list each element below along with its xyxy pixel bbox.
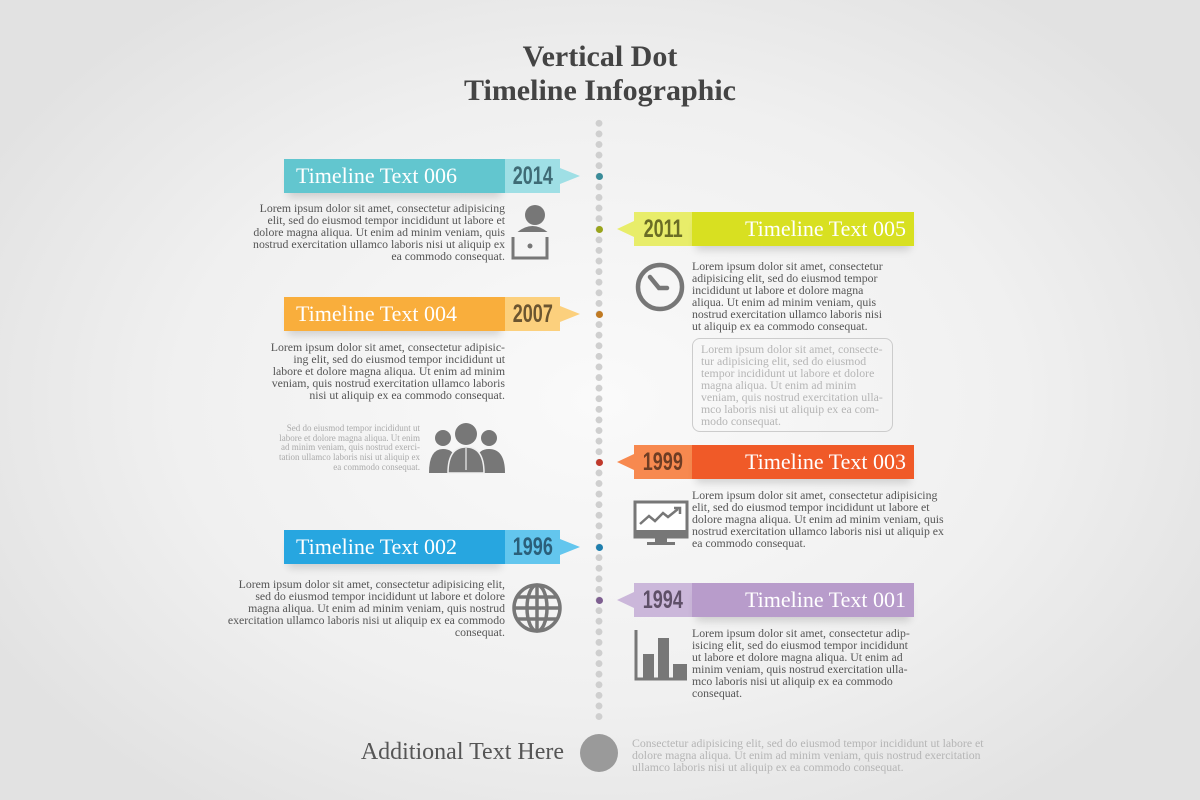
bottom text bbox=[632, 736, 984, 774]
icon: person at laptop bbox=[512, 205, 548, 260]
text 004 bbox=[271, 340, 505, 402]
banner 006: 2014 bbox=[513, 162, 553, 190]
small text people: Sed do eiusmod tempor incididunt ut bbox=[287, 423, 420, 433]
dot 1994 bbox=[596, 596, 602, 604]
text 001: mco laboris nisi ut aliquip ex ea commodo bbox=[692, 674, 893, 688]
dot 1996 bbox=[596, 544, 602, 550]
text 003: elit, sed do eiusmod tempor incididunt ut labore et bbox=[692, 500, 930, 514]
text 004: Lorem ipsum dolor sit amet, consectetur adipisic- bbox=[271, 340, 505, 354]
text 002: sed do eiusmod tempor incididunt ut labore et dolore bbox=[255, 589, 505, 603]
text 003: ea commodo consequat. bbox=[692, 536, 806, 550]
text 003: nostrud exercitation ullamco laboris nisi ut aliquip ex bbox=[692, 524, 944, 538]
banner 006: Timeline Text 006 bbox=[296, 163, 457, 188]
callout text: tempor incididunt ut labore et dolore bbox=[701, 366, 874, 380]
icon: people group bbox=[429, 423, 505, 473]
text 005: adipisicing elit, sed do eiusmod tempor bbox=[692, 271, 877, 285]
bottom text: ullamco laboris nisi ut aliquip ex ea commodo consequat. bbox=[632, 760, 904, 774]
text 006: dolore magna aliqua. Ut enim ad minim veniam, quis bbox=[253, 225, 505, 239]
text 005 bbox=[692, 259, 883, 333]
text 006: elit, sed do eiusmod tempor incididunt ut labore et bbox=[267, 213, 505, 227]
title bbox=[464, 40, 736, 107]
callout text: veniam, quis nostrud exercitation ulla- bbox=[701, 390, 883, 404]
small text people: ad minim veniam, quis nostrud exerci- bbox=[281, 442, 420, 452]
callout text: tur adipisicing elit, sed do eiusmod bbox=[701, 354, 866, 368]
banner 001: 1994 bbox=[643, 586, 683, 614]
text 002: exercitation ullamco laboris nisi ut aliquip ex ea commodo bbox=[228, 613, 505, 627]
banner 002: Timeline Text 002 bbox=[296, 534, 457, 559]
text 004: ing elit, sed do eiusmod tempor incididunt ut bbox=[293, 352, 505, 366]
text 001: consequat. bbox=[692, 686, 742, 700]
text 002: consequat. bbox=[455, 625, 505, 639]
banner 002 bbox=[284, 530, 580, 571]
banner 004: 2007 bbox=[513, 300, 553, 328]
callout text bbox=[701, 342, 883, 428]
icon: globe bbox=[512, 583, 562, 633]
text 006: nostrud exercitation ullamco laboris nisi ut aliquip ex bbox=[253, 237, 505, 251]
text 002: magna aliqua. Ut enim ad minim veniam, quis nostrud bbox=[248, 601, 505, 615]
small text people: tation ullamco laboris nisi ut aliquip ex bbox=[279, 452, 420, 462]
small text people: ea commodo consequat. bbox=[333, 462, 420, 472]
text 003: dolore magna aliqua. Ut enim ad minim veniam, quis bbox=[692, 512, 944, 526]
text 004: labore et dolore magna aliqua. Ut enim ad minim bbox=[273, 364, 505, 378]
banner 001 bbox=[617, 583, 914, 624]
additional text heading: Additional Text Here bbox=[361, 739, 564, 765]
text 005: ut aliquip ex ea commodo consequat. bbox=[692, 319, 868, 333]
callout box bbox=[692, 338, 893, 432]
dot 2014 bbox=[596, 172, 602, 180]
icon: monitor chart bbox=[634, 500, 688, 545]
dot 2007 bbox=[596, 310, 602, 318]
text 004: nisi ut aliquip ex ea commodo consequat. bbox=[309, 388, 505, 402]
banner 002: 1996 bbox=[513, 533, 553, 561]
text 006: Lorem ipsum dolor sit amet, consectetur adipisicing bbox=[260, 201, 505, 215]
banner 003: 1999 bbox=[643, 448, 683, 476]
banner 003: Timeline Text 003 bbox=[745, 449, 906, 474]
text 006: ea commodo consequat. bbox=[391, 249, 505, 263]
bottom text: dolore magna aliqua. Ut enim ad minim veniam, quis nostrud exercitation bbox=[632, 748, 981, 762]
text 001 bbox=[692, 626, 910, 700]
text 001: ut labore et dolore magna aliqua. Ut enim ad bbox=[692, 650, 903, 664]
text 002 bbox=[228, 577, 505, 639]
end circle bbox=[580, 734, 618, 772]
text 005: nostrud exercitation ullamco laboris nisi bbox=[692, 307, 882, 321]
text 005: aliqua. Ut enim ad minim veniam, quis bbox=[692, 295, 876, 309]
title: Timeline Infographic bbox=[464, 74, 736, 107]
text 005: Lorem ipsum dolor sit amet, consectetur bbox=[692, 259, 883, 273]
banner 004 bbox=[284, 297, 580, 338]
text 004: veniam, quis nostrud exercitation ullamco laboris bbox=[272, 376, 505, 390]
callout text: modo consequat. bbox=[701, 414, 781, 428]
text 001: isicing elit, sed do eiusmod tempor incididunt bbox=[692, 638, 908, 652]
icon: clock bbox=[636, 262, 684, 312]
text 003 bbox=[692, 488, 944, 550]
text 006 bbox=[253, 201, 505, 263]
text 001: Lorem ipsum dolor sit amet, consectetur adip- bbox=[692, 626, 910, 640]
bottom text: Consectetur adipisicing elit, sed do eiusmod tempor incididunt ut labore et bbox=[632, 736, 984, 750]
text 003: Lorem ipsum dolor sit amet, consectetur adipisicing bbox=[692, 488, 937, 502]
small text people bbox=[279, 423, 420, 472]
banner 001: Timeline Text 001 bbox=[745, 587, 906, 612]
text 001: minim veniam, quis nostrud exercitation ulla- bbox=[692, 662, 908, 676]
callout text: Lorem ipsum dolor sit amet, consecte- bbox=[701, 342, 882, 356]
title: Vertical Dot bbox=[523, 40, 677, 73]
dotted timeline line bbox=[595, 118, 603, 722]
dot 2011 bbox=[596, 226, 602, 232]
banner 005: Timeline Text 005 bbox=[745, 216, 906, 241]
banner 004: Timeline Text 004 bbox=[296, 301, 457, 326]
small text people: labore et dolore magna aliqua. Ut enim bbox=[279, 433, 420, 443]
banner 005: 2011 bbox=[643, 215, 683, 243]
banner 006 bbox=[284, 159, 580, 200]
icon: bar chart bbox=[634, 630, 687, 680]
text 005: incididunt ut labore et dolore magna bbox=[692, 283, 863, 297]
callout text: magna aliqua. Ut enim ad minim bbox=[701, 378, 856, 392]
banner 003 bbox=[617, 445, 914, 486]
dot 1999 bbox=[596, 458, 602, 466]
text 002: Lorem ipsum dolor sit amet, consectetur adipisicing elit, bbox=[239, 577, 505, 591]
callout text: mco laboris nisi ut aliquip ex ea com- bbox=[701, 402, 879, 416]
banner 005 bbox=[617, 212, 914, 253]
